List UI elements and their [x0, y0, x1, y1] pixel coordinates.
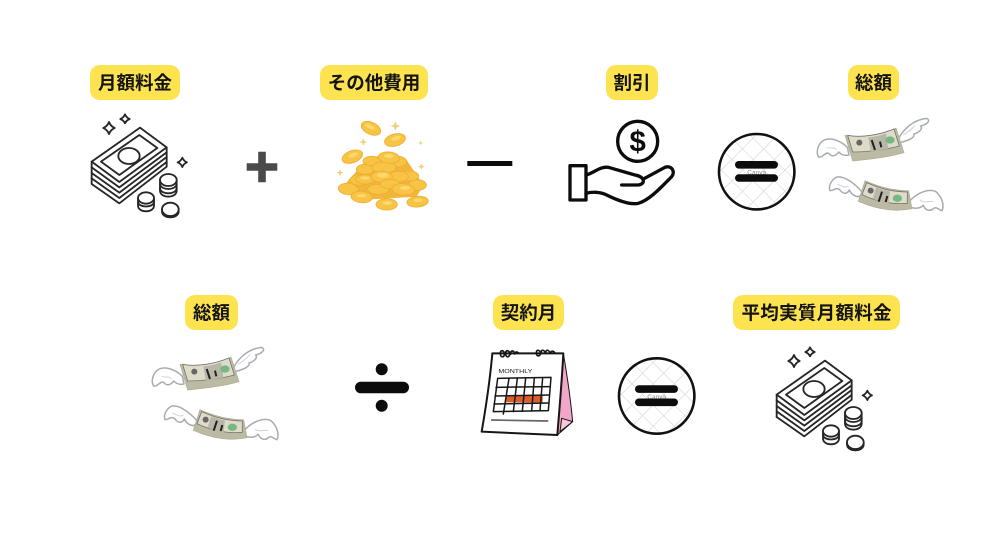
label: 契約月 [493, 295, 564, 330]
label: 月額料金 [90, 65, 180, 100]
minus sign [467, 161, 512, 166]
icon: desk calendar: MONTHLY [498, 369, 533, 375]
label: 総額 (top) [848, 65, 899, 100]
label: 総額 (bottom) [185, 295, 238, 330]
label: 平均実質月額料金: 平均実質月額料金 [742, 302, 892, 323]
label: 総額 (top): 総額 [855, 72, 892, 93]
icon: hand holding dollar coin [570, 121, 673, 204]
label: その他費用 [320, 65, 428, 100]
icon: flying money (top) [817, 118, 943, 211]
label: 割引 [606, 65, 658, 100]
icon: desk calendar [482, 350, 573, 435]
label: 割引: 割引 [613, 72, 651, 93]
equals circle (bottom) [619, 358, 694, 434]
icon: money stack with coins [92, 114, 187, 217]
icon: money stack with coins (bottom) [777, 347, 872, 450]
label: 平均実質月額料金 [733, 295, 900, 330]
icon: pile of gold coins [336, 119, 429, 210]
icon: hand holding dollar coin: $ [630, 126, 646, 159]
label: 契約月: 契約月 [501, 302, 556, 323]
label: その他費用: その他費用 [328, 72, 420, 93]
equals circle (top) [719, 134, 794, 209]
plus sign [247, 152, 277, 182]
label: 総額 (bottom): 総額 [193, 302, 230, 323]
division sign [355, 363, 409, 412]
label: 月額料金: 月額料金 [98, 72, 172, 93]
icon: flying money (bottom) [152, 347, 278, 440]
